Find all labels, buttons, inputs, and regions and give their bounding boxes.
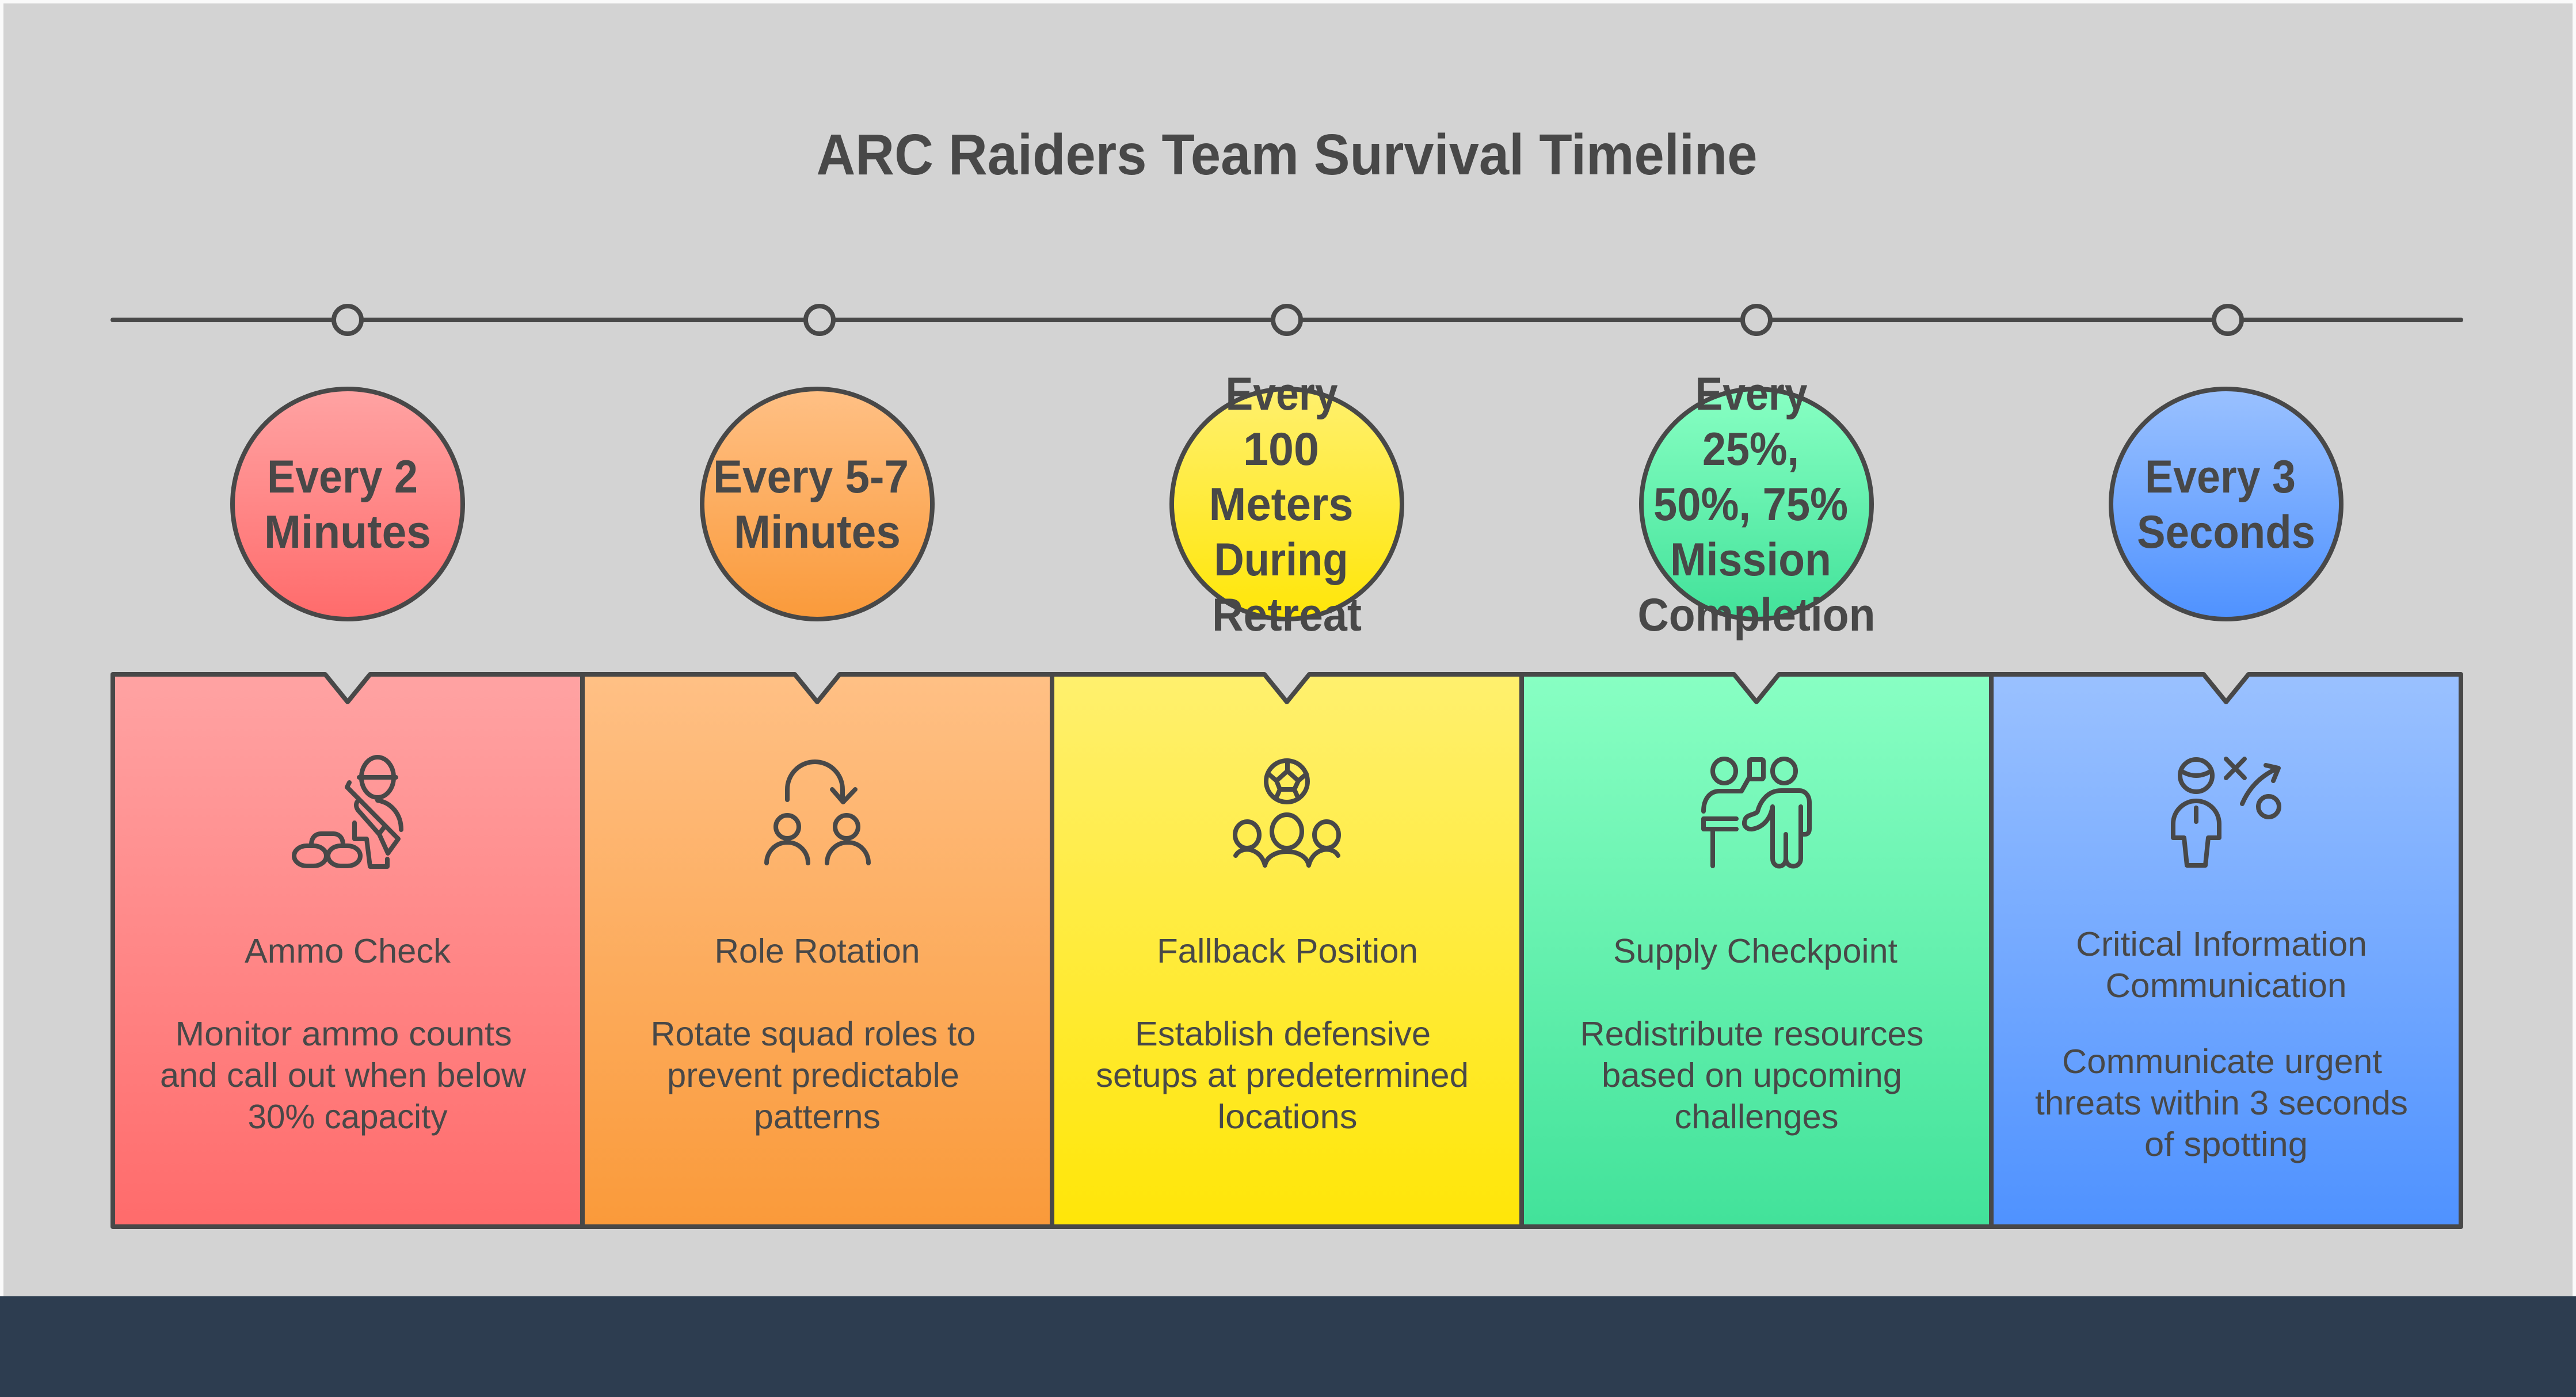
frequency circle: every 3 seconds: Seconds [2137, 506, 2315, 558]
description [1580, 1015, 1923, 1136]
icon: team regrouping [1235, 761, 1339, 865]
description: of spotting [2144, 1125, 2308, 1163]
title: ARC Raiders Team Survival Timeline [816, 123, 1758, 187]
frequency circle: every 100 meters: During [1214, 534, 1348, 586]
frequency circle: every 100 meters: Retreat [1212, 589, 1362, 641]
panel: critical information communication [1991, 674, 2461, 1227]
frequency circle: mission completion [1638, 368, 1875, 641]
description: Redistribute resources [1580, 1015, 1923, 1053]
description: locations [1218, 1098, 1357, 1136]
icon: tactical person [2173, 759, 2279, 865]
description [1096, 1015, 1469, 1136]
icon: supply checkpoint figures [1704, 759, 1809, 867]
frequency circle: every 2 minutes: Every 2 [267, 451, 418, 503]
heading: Ammo Check [245, 932, 451, 970]
description: based on upcoming [1602, 1056, 1902, 1094]
description: Establish defensive [1135, 1015, 1431, 1053]
description [160, 1015, 526, 1136]
frequency circle: every 100 meters: Every [1226, 368, 1337, 420]
footer band [0, 1296, 2576, 1397]
panel: supply checkpoint [1522, 674, 1991, 1227]
frequency circle: every 5-7 minutes: Minutes [734, 506, 901, 558]
description: prevent predictable [667, 1056, 959, 1094]
frequency circle: every 100 meters: 100 [1243, 423, 1319, 475]
frequency circle: every 3 seconds [2111, 389, 2341, 619]
panel: ammo check [113, 674, 582, 1227]
frequency circle: every 3 seconds: Every 3 [2145, 451, 2296, 503]
heading: Critical Information [2076, 925, 2367, 963]
frequency circle: every 100 meters [1172, 368, 1402, 641]
description [650, 1015, 976, 1136]
frequency circle: mission completion: Mission [1670, 534, 1831, 586]
heading: Communication [2105, 967, 2347, 1005]
frequency circle: mission completion: Every [1695, 368, 1807, 420]
description: challenges [1675, 1098, 1838, 1136]
description: patterns [754, 1098, 881, 1136]
description: and call out when below [160, 1056, 526, 1094]
heading [2076, 925, 2367, 1005]
timeline axis with markers [113, 306, 2461, 334]
heading: Fallback Position [1157, 932, 1418, 970]
description: threats within 3 seconds [2035, 1084, 2408, 1122]
description: Communicate urgent [2062, 1043, 2382, 1081]
frequency circle: every 5-7 minutes [702, 389, 932, 619]
heading: Role Rotation [715, 932, 920, 970]
frequency circle: every 2 minutes [233, 389, 463, 619]
frequency circle: mission completion: Completion [1638, 589, 1875, 641]
frequency circle: mission completion: 25%, [1702, 423, 1799, 475]
frequency circle: every 100 meters: Meters [1209, 479, 1354, 530]
frequency circle: every 2 minutes: Minutes [264, 506, 431, 558]
heading: Supply Checkpoint [1613, 932, 1897, 970]
frequency circle: every 5-7 minutes: Every 5-7 [713, 451, 909, 503]
icon: soldier with ammo [294, 757, 401, 867]
panel: fallback position [1052, 674, 1522, 1227]
description: Rotate squad roles to [650, 1015, 976, 1053]
description: setups at predetermined [1096, 1056, 1469, 1094]
panel: role rotation [582, 674, 1052, 1227]
frequency circle: mission completion: 50%, 75% [1653, 479, 1848, 530]
description: Monitor ammo counts [175, 1015, 512, 1053]
description [2035, 1043, 2408, 1163]
description: 30% capacity [247, 1098, 448, 1136]
icon: rotating roles [767, 762, 868, 863]
